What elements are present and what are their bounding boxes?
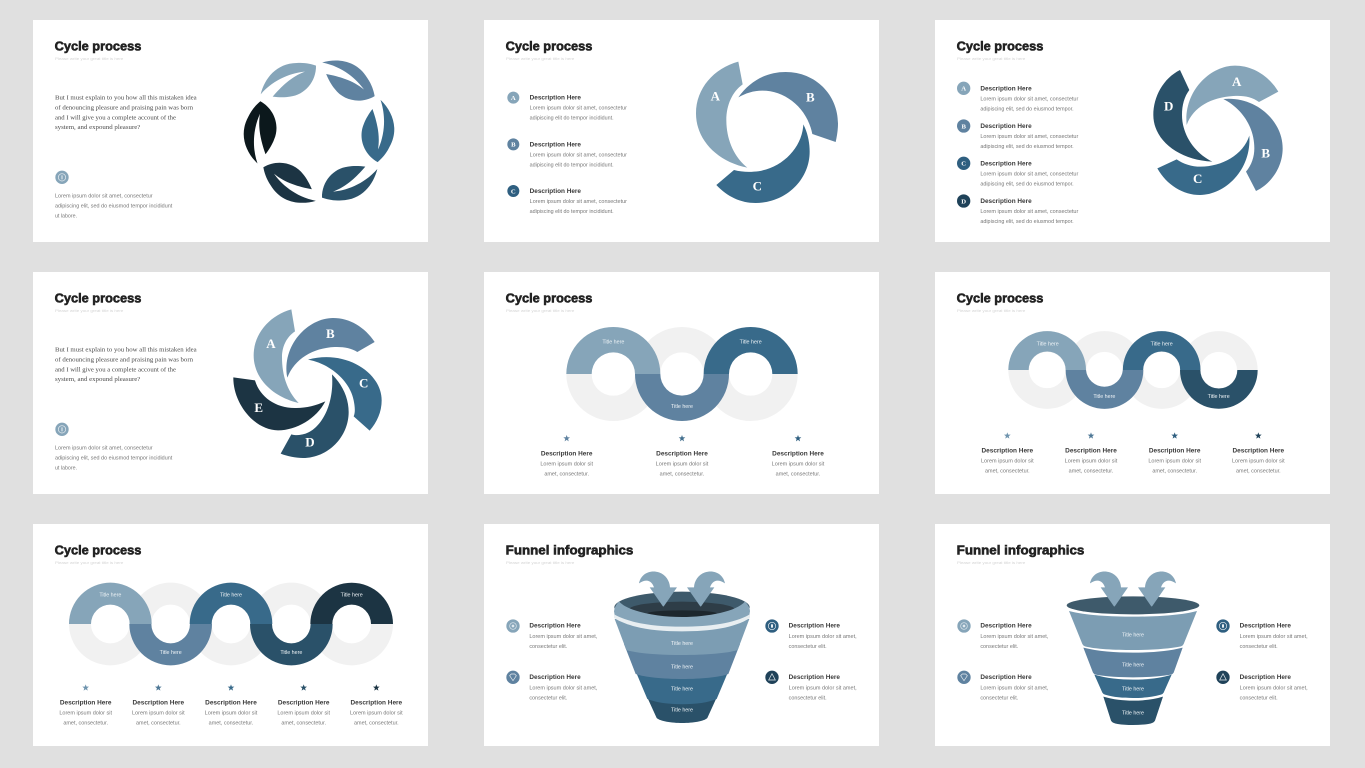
lorem text: ut labore.: [55, 213, 77, 219]
item B: Description Here: [530, 142, 582, 148]
subtitle: Please write your great title is here: [55, 309, 123, 313]
heading: Cycle process: [957, 39, 1043, 54]
chart: wave: Title here: [341, 593, 363, 599]
column 1: [540, 435, 594, 477]
column 2: Description Here: [132, 701, 185, 707]
paragraph: of denouncing pleasure and praising pain was born: [55, 104, 194, 111]
item: bottom right: consectetur elit.: [789, 695, 827, 701]
chart: wave: Title here: [1037, 342, 1059, 348]
item: top left: consectetur elit.: [980, 644, 1018, 650]
column 3: [205, 684, 258, 727]
item: top right: Lorem ipsum dolor sit amet,: [789, 634, 857, 640]
item: top right: Description Here: [789, 624, 841, 630]
item A: adipiscing elit do tempor incididunt.: [530, 116, 614, 122]
item D: [957, 194, 1079, 225]
paragraph: But I must explain to you how all this mistaken idea: [55, 346, 197, 353]
chart: five-arm spiral: [233, 309, 382, 458]
chart: four-arm spiral: A: [1232, 74, 1242, 89]
heading: Funnel infographics: [506, 543, 633, 558]
chart: wave: [69, 583, 393, 665]
column 1: Description Here: [981, 449, 1034, 455]
column 3: [1148, 432, 1202, 475]
item: top left: [506, 619, 597, 650]
chart: separated funnel: [1067, 596, 1199, 725]
column 2: amet, consectetur.: [136, 721, 181, 727]
item: top left: [957, 619, 1048, 650]
column 3: Description Here: [205, 701, 258, 707]
paragraph: system, and expound pleasure?: [55, 124, 140, 131]
chart: 3D funnel: Title here: [671, 664, 693, 670]
lorem text: Lorem ipsum dolor sit amet, consectetur: [55, 446, 153, 452]
chart: wave: Title here: [1093, 394, 1115, 400]
chart: five-arm spiral: E: [254, 400, 263, 415]
chart: wave: [566, 327, 798, 421]
heading: Cycle process: [957, 291, 1043, 306]
arrow: right: [687, 571, 725, 606]
panel: three-arm cycle: [484, 20, 879, 242]
column 1: amet, consectetur.: [544, 471, 589, 477]
item: bottom right: Lorem ipsum dolor sit amet,: [1240, 685, 1308, 691]
icon: info badge: [55, 423, 69, 436]
item C: adipiscing elit do tempor incididunt.: [530, 209, 614, 215]
heading: Cycle process: [506, 39, 592, 54]
item A: Description Here: [530, 96, 582, 102]
item: top right: consectetur elit.: [789, 644, 827, 650]
chart: 3D funnel: Title here: [671, 687, 693, 693]
item C: C: [961, 161, 966, 168]
item C: [957, 157, 1079, 187]
chart: separated funnel: Title here: [1122, 663, 1144, 669]
item: top right: Lorem ipsum dolor sit amet,: [1240, 634, 1308, 640]
paragraph: and I will give you a complete account of the: [55, 366, 176, 373]
chart: wave: Title here: [220, 593, 242, 599]
column 3: amet, consectetur.: [1152, 469, 1197, 475]
paragraph: and I will give you a complete account of the: [55, 114, 176, 121]
chart: five-arm spiral: B: [326, 326, 335, 341]
column 3: Lorem ipsum dolor sit: [1148, 459, 1202, 465]
column 4: [277, 684, 331, 727]
column 4: Lorem ipsum dolor sit: [277, 711, 331, 717]
column 1: [59, 684, 113, 727]
panel: four-arm cycle: [935, 20, 1330, 242]
item D: Lorem ipsum dolor sit amet, consectetur: [980, 209, 1079, 215]
panel: three-step wave: [484, 272, 879, 494]
item B: adipiscing elit do tempor incididunt.: [530, 162, 614, 168]
chart: 3D funnel: Title here: [671, 708, 693, 714]
item C: Lorem ipsum dolor sit amet, consectetur: [530, 199, 627, 205]
heading: Cycle process: [55, 543, 141, 558]
column 2: Lorem ipsum dolor sit: [656, 461, 709, 467]
column 2: [1065, 432, 1118, 475]
subtitle: Please write your great title is here: [55, 561, 123, 565]
item: bottom right: Description Here: [1240, 675, 1292, 681]
paragraph: of denouncing pleasure and praising pain was born: [55, 356, 194, 363]
heading: Funnel infographics: [957, 543, 1084, 558]
item: top right: Description Here: [1240, 624, 1292, 630]
chart: wave: Title here: [1208, 394, 1230, 400]
chart: four-arm spiral: B: [1261, 145, 1270, 160]
panel: five-arm cycle: [33, 272, 428, 494]
lorem text: [55, 194, 173, 219]
item: top left: Description Here: [980, 624, 1032, 630]
item D: D: [961, 198, 966, 205]
item A: A: [511, 95, 516, 102]
chart: four-arm spiral: C: [1193, 171, 1202, 186]
item B: adipiscing elit, sed do eiusmod tempor.: [980, 144, 1074, 150]
chart: three-arm spiral: C: [753, 178, 762, 193]
column 3: Lorem ipsum dolor sit: [772, 461, 825, 467]
item: top left: Lorem ipsum dolor sit amet,: [529, 634, 597, 640]
chart: separated funnel: Title here: [1122, 687, 1144, 693]
item: top right: [1216, 619, 1308, 650]
column 3: Description Here: [1149, 449, 1201, 455]
chart: wave: [1008, 331, 1258, 409]
chart: wave: Title here: [740, 339, 762, 345]
item D: Description Here: [980, 199, 1032, 205]
subtitle: Please write your great title is here: [506, 57, 574, 61]
column 2: amet, consectetur.: [660, 471, 704, 477]
chart: five-arm spiral: C: [359, 375, 368, 390]
column 4: amet, consectetur.: [281, 721, 326, 727]
item A: Lorem ipsum dolor sit amet, consectetur: [530, 106, 627, 112]
chart: 3D funnel: [614, 592, 750, 723]
item C: Description Here: [530, 189, 582, 195]
column 5: [350, 684, 403, 727]
column 1: Description Here: [60, 701, 112, 707]
item: bottom right: [765, 671, 857, 701]
chart: separated funnel: Title here: [1122, 710, 1144, 716]
column 2: [656, 435, 709, 477]
chart: three-arm spiral: B: [806, 90, 815, 105]
item B: B: [961, 123, 966, 130]
heading: Cycle process: [55, 39, 141, 54]
item: bottom left: [957, 671, 1048, 701]
item: bottom left: consectetur elit.: [980, 695, 1018, 701]
item A: Lorem ipsum dolor sit amet, consectetur: [980, 97, 1079, 103]
item A: adipiscing elit, sed do eiusmod tempor.: [980, 107, 1074, 113]
item A: A: [961, 86, 966, 93]
subtitle: Please write your great title is here: [957, 309, 1025, 313]
item: bottom left: Lorem ipsum dolor sit amet,: [980, 685, 1048, 691]
lorem text: adipiscing elit, sed do eiusmod tempor incididunt: [55, 456, 173, 462]
lorem text: adipiscing elit, sed do eiusmod tempor incididunt: [55, 204, 173, 210]
chart: wave: Title here: [280, 650, 302, 656]
item: top left: consectetur elit.: [529, 644, 567, 650]
column 2: Description Here: [1065, 449, 1118, 455]
item A: [507, 92, 627, 122]
column 4: amet, consectetur.: [1236, 469, 1281, 475]
column 3: amet, consectetur.: [776, 471, 820, 477]
lorem text: Lorem ipsum dolor sit amet, consectetur: [55, 194, 153, 200]
item: top left: Description Here: [529, 624, 581, 630]
item: bottom left: Lorem ipsum dolor sit amet,: [529, 685, 597, 691]
heading: Cycle process: [55, 291, 141, 306]
item C: C: [511, 188, 516, 195]
item: top right: [765, 619, 857, 650]
item: bottom left: Description Here: [980, 675, 1032, 681]
column 5: Description Here: [350, 701, 403, 707]
chart: wave: Title here: [160, 650, 182, 656]
item A: Description Here: [980, 86, 1032, 92]
item B: Lorem ipsum dolor sit amet, consectetur: [530, 152, 627, 158]
paragraph: But I must explain to you how all this mistaken idea: [55, 94, 197, 101]
column 1: amet, consectetur.: [63, 721, 108, 727]
chart: three-arm spiral: [696, 62, 838, 203]
column 3: amet, consectetur.: [209, 721, 253, 727]
column 4: [1232, 432, 1285, 475]
item: bottom left: Description Here: [529, 675, 581, 681]
item: top right: consectetur elit.: [1240, 644, 1278, 650]
item: bottom right: Description Here: [789, 675, 841, 681]
item C: Description Here: [980, 161, 1032, 167]
chart: four-arm spiral: D: [1164, 98, 1173, 113]
item B: B: [511, 142, 516, 149]
item B: Lorem ipsum dolor sit amet, consectetur: [980, 134, 1079, 140]
paragraph: [55, 94, 197, 131]
column 1: Lorem ipsum dolor sit: [540, 461, 594, 467]
item: bottom right: Lorem ipsum dolor sit amet,: [789, 685, 857, 691]
column 1: [981, 432, 1034, 475]
chart: four-arm spiral: [1153, 66, 1283, 195]
item: bottom right: consectetur elit.: [1240, 695, 1278, 701]
item A: [957, 82, 1079, 113]
arrow: right: [1138, 571, 1176, 606]
item: bottom left: consectetur elit.: [529, 695, 567, 701]
heading: Cycle process: [506, 291, 592, 306]
subtitle: Please write your great title is here: [55, 57, 123, 61]
lorem text: ut labore.: [55, 465, 77, 471]
panel: five-step wave: [33, 524, 428, 746]
chart: leaf cycle: [230, 47, 408, 217]
chart: wave: Title here: [602, 339, 624, 345]
panel: six-leaf cycle: [33, 20, 428, 242]
arrow: left: [639, 571, 677, 606]
column 4: Description Here: [278, 701, 330, 707]
item C: [507, 185, 627, 215]
arrow: left: [1090, 571, 1128, 606]
item D: adipiscing elit, sed do eiusmod tempor.: [980, 219, 1074, 225]
column 3: Lorem ipsum dolor sit: [205, 711, 258, 717]
chart: 3D funnel: Title here: [671, 641, 693, 647]
column 2: [132, 684, 185, 727]
column 1: Lorem ipsum dolor sit: [981, 459, 1034, 465]
column 5: amet, consectetur.: [354, 721, 399, 727]
item: bottom left: [506, 671, 597, 701]
column 1: amet, consectetur.: [985, 469, 1030, 475]
panel: separated funnel: [935, 524, 1330, 746]
column 4: Description Here: [1232, 449, 1285, 455]
item: bottom right: [1216, 671, 1308, 701]
chart: wave: Title here: [1151, 342, 1173, 348]
paragraph: system, and expound pleasure?: [55, 376, 140, 383]
subtitle: Please write your great title is here: [957, 561, 1025, 565]
chart: five-arm spiral: D: [305, 434, 315, 449]
column 4: Lorem ipsum dolor sit: [1232, 459, 1285, 465]
column 3: Description Here: [772, 451, 825, 457]
chart: five-arm spiral: A: [266, 336, 276, 351]
lorem text: [55, 446, 173, 471]
column 2: Lorem ipsum dolor sit: [132, 711, 185, 717]
column 1: Description Here: [541, 451, 593, 457]
item B: [507, 138, 627, 168]
item B: [957, 119, 1079, 150]
chart: wave: Title here: [671, 404, 693, 410]
column 3: [772, 435, 825, 477]
item B: Description Here: [980, 124, 1032, 130]
chart: wave: Title here: [99, 593, 121, 599]
panel: four-step wave: [935, 272, 1330, 494]
panel: 3D funnel: [484, 524, 879, 746]
item C: Lorem ipsum dolor sit amet, consectetur: [980, 171, 1079, 177]
column 2: Description Here: [656, 451, 709, 457]
column 5: Lorem ipsum dolor sit: [350, 711, 403, 717]
column 1: Lorem ipsum dolor sit: [59, 711, 113, 717]
item C: adipiscing elit, sed do eiusmod tempor.: [980, 181, 1074, 187]
column 2: amet, consectetur.: [1069, 469, 1113, 475]
subtitle: Please write your great title is here: [506, 309, 574, 313]
column 2: Lorem ipsum dolor sit: [1065, 459, 1118, 465]
chart: three-arm spiral: A: [711, 88, 721, 103]
subtitle: Please write your great title is here: [506, 561, 574, 565]
subtitle: Please write your great title is here: [957, 57, 1025, 61]
chart: separated funnel: Title here: [1122, 632, 1144, 638]
item: top left: Lorem ipsum dolor sit amet,: [980, 634, 1048, 640]
icon: info badge: [55, 171, 69, 184]
paragraph: [55, 346, 197, 383]
